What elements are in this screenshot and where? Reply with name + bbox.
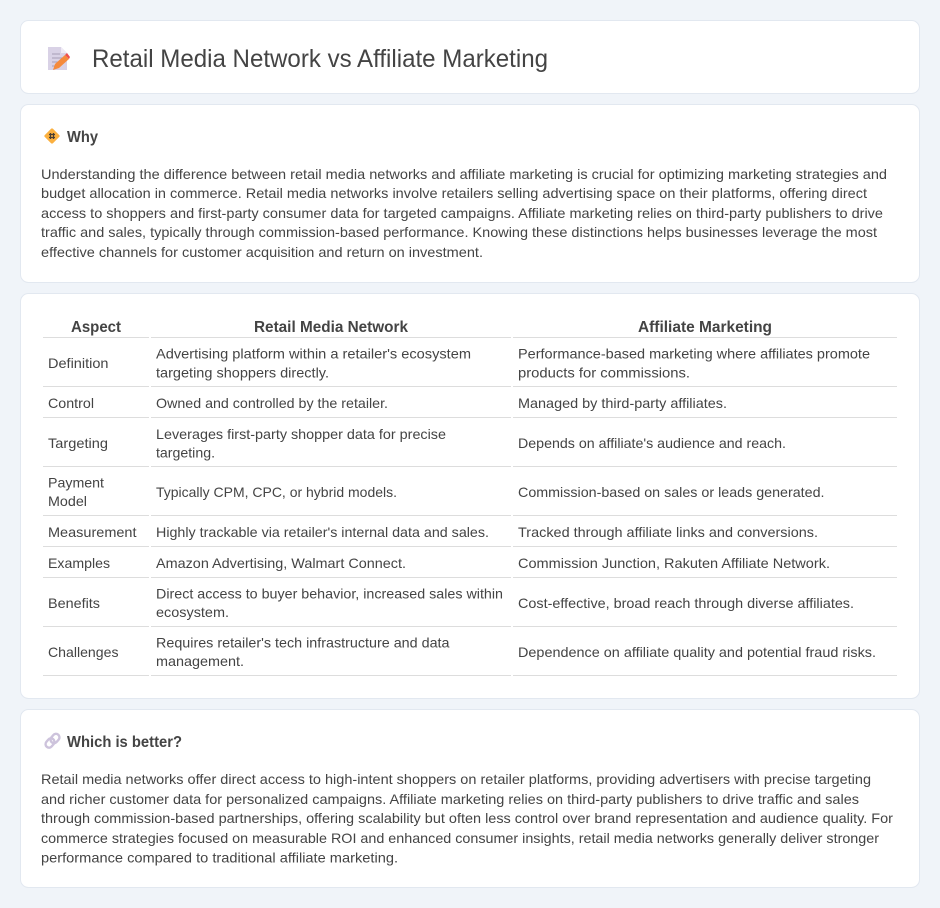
icon: document with pencil [48, 47, 70, 70]
row: benefits [48, 586, 854, 620]
row: benefits: Direct access to buyer behavior, increased sales within [156, 586, 503, 602]
row: payment model: Typically CPM, CPC, or hybrid models. [156, 484, 397, 500]
row: definition [48, 346, 870, 380]
text block: which is better [41, 771, 893, 866]
row: payment model [48, 474, 824, 509]
row: measurement: Highly trackable via retailer's internal data and sales. [156, 524, 489, 540]
text block: why: effective channels for customer acquisition and return on investment. [41, 244, 483, 260]
row: control: Control [48, 395, 94, 411]
row: examples [48, 555, 830, 571]
panel: comparison table [20, 294, 920, 698]
row: definition: Performance-based marketing where affiliates promote [518, 346, 870, 362]
heading: which is better: Which is better? [67, 734, 182, 751]
row: definition: Definition [48, 355, 108, 371]
row: examples: Amazon Advertising, Walmart Connect. [156, 555, 406, 571]
row: control: Managed by third-party affiliates. [518, 395, 727, 411]
table header: Aspect [71, 319, 122, 336]
text block: which is better: and richer customer data for personalized campaigns. Affiliate marketing relies on third-party publishers to drive traffic and sales [41, 791, 859, 807]
row: examples: Examples [48, 555, 110, 571]
row: benefits: Cost-effective, broad reach through diverse affiliates. [518, 595, 854, 611]
row: payment model: Model [48, 493, 87, 509]
row: targeting [48, 426, 786, 460]
title text: Retail Media Network vs Affiliate Marketing [92, 45, 548, 73]
row: challenges: Challenges [48, 644, 118, 660]
panel: why [20, 104, 920, 282]
row: benefits: ecosystem. [156, 604, 229, 620]
text block: which is better: performance compared to traditional affiliate marketing. [41, 850, 398, 866]
row: control: Owned and controlled by the retailer. [156, 395, 388, 411]
row: measurement [48, 524, 818, 540]
text block: why [41, 166, 887, 260]
row: targeting: targeting. [156, 444, 215, 460]
text block: which is better: Retail media networks offer direct access to high-intent shoppers on retailer platforms, providing advertisers with precise targeting [41, 771, 871, 787]
row: measurement: Measurement [48, 524, 137, 540]
row: examples: Commission Junction, Rakuten Affiliate Network. [518, 555, 830, 571]
table header [71, 319, 772, 336]
row: payment model: Commission-based on sales or leads generated. [518, 484, 824, 500]
text block: why: traffic and sales, typically through commission-based performance. Knowing these distinctions helps businesses leverage the most [41, 224, 877, 240]
row: challenges [48, 634, 876, 669]
row: control [48, 395, 727, 411]
icon: link [44, 732, 61, 749]
row: payment model: Payment [48, 474, 104, 490]
table header: Affiliate Marketing [638, 319, 772, 336]
table header: Retail Media Network [254, 319, 408, 336]
row: targeting: Depends on affiliate's audience and reach. [518, 435, 786, 451]
row: challenges: Dependence on affiliate quality and potential fraud risks. [518, 644, 876, 660]
text block: why: Understanding the difference between retail media networks and affiliate marketing is crucial for optimizing marketing strategies and [41, 166, 887, 182]
row: measurement: Tracked through affiliate links and conversions. [518, 524, 818, 540]
text block: which is better: commerce strategies focused on measurable ROI and enhanced consumer insights, retail media networks generally deliver stronger [41, 830, 879, 846]
panel: which is better [20, 710, 920, 888]
icon: diamond sign [44, 128, 60, 144]
panel: title [20, 20, 920, 94]
row: challenges: management. [156, 653, 244, 669]
row: definition: targeting shoppers directly. [156, 364, 329, 380]
row: targeting: Leverages first-party shopper data for precise [156, 426, 446, 442]
text block: which is better: through commission-based partnerships, offering scalability but often less control over brand representation and audience quality. For [41, 810, 893, 826]
text block: why: budget allocation in commerce. Retail media networks involve retailers selling advertising space on their platforms, offering direct [41, 185, 867, 201]
row: targeting: Targeting [48, 435, 108, 451]
row: definition: Advertising platform within a retailer's ecosystem [156, 346, 471, 362]
row: benefits: Benefits [48, 595, 100, 611]
row: definition: products for commissions. [518, 364, 690, 380]
row: challenges: Requires retailer's tech infrastructure and data [156, 634, 450, 650]
text block: why: access to shoppers and first-party consumer data for targeted campaigns. Affiliate marketing relies on third-party publishers to drive [41, 205, 883, 221]
heading: why: Why [67, 129, 98, 146]
